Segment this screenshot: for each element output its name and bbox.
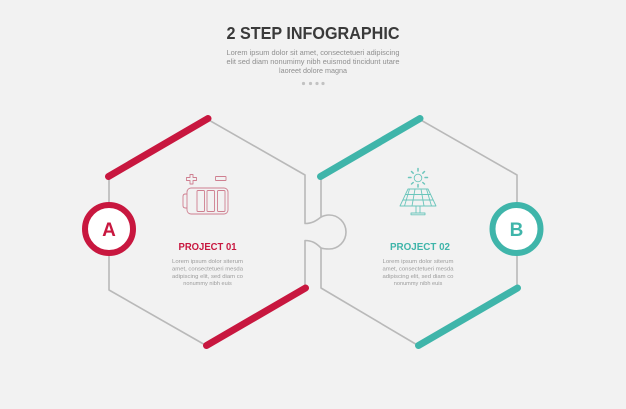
project 01 text: amet, consectetueri mesda (172, 266, 244, 272)
project 02 text: adipiscing elit, sed diam co (382, 274, 454, 280)
teal accent bar bottom (418, 288, 518, 346)
teal accent bar top (320, 118, 420, 176)
project 01 heading: PROJECT 01 (178, 242, 237, 253)
project 02 text: amet, consectetueri mesda (382, 266, 454, 272)
project 01 text: Lorem ipsum dolor siterum (172, 259, 243, 265)
subtitle: laoreet dolore magna (279, 66, 347, 75)
badge A: A (102, 220, 116, 241)
badge B: B (510, 220, 523, 241)
subtitle: Lorem ipsum dolor sit amet, consectetueri adipiscing (226, 48, 400, 57)
project 02 text (382, 259, 454, 287)
project 02 heading: PROJECT 02 (390, 242, 450, 253)
project 02 text: Lorem ipsum dolor siterum (382, 259, 454, 265)
left hexagon outline with puzzle socket (109, 119, 321, 346)
subtitle: elit sed diam nonumimy nibh euismod tincidunt utare (226, 57, 400, 66)
project 01 text (172, 259, 244, 287)
pagination dots (302, 82, 325, 85)
project 01 text: nonummy nibh euis (183, 281, 232, 287)
icon: battery (183, 174, 228, 214)
red accent bar bottom (206, 288, 306, 346)
project 01 text: adipiscing elit, sed diam co (172, 274, 243, 280)
red accent bar top (108, 118, 208, 176)
badge A (85, 205, 133, 253)
project 02 text: nonummy nibh euis (394, 281, 442, 287)
icon: solar panel (400, 168, 436, 215)
right hexagon outline with puzzle knob (321, 119, 517, 346)
subtitle (226, 48, 400, 75)
title: 2 STEP INFOGRAPHIC (226, 23, 400, 43)
badge B (492, 205, 540, 253)
